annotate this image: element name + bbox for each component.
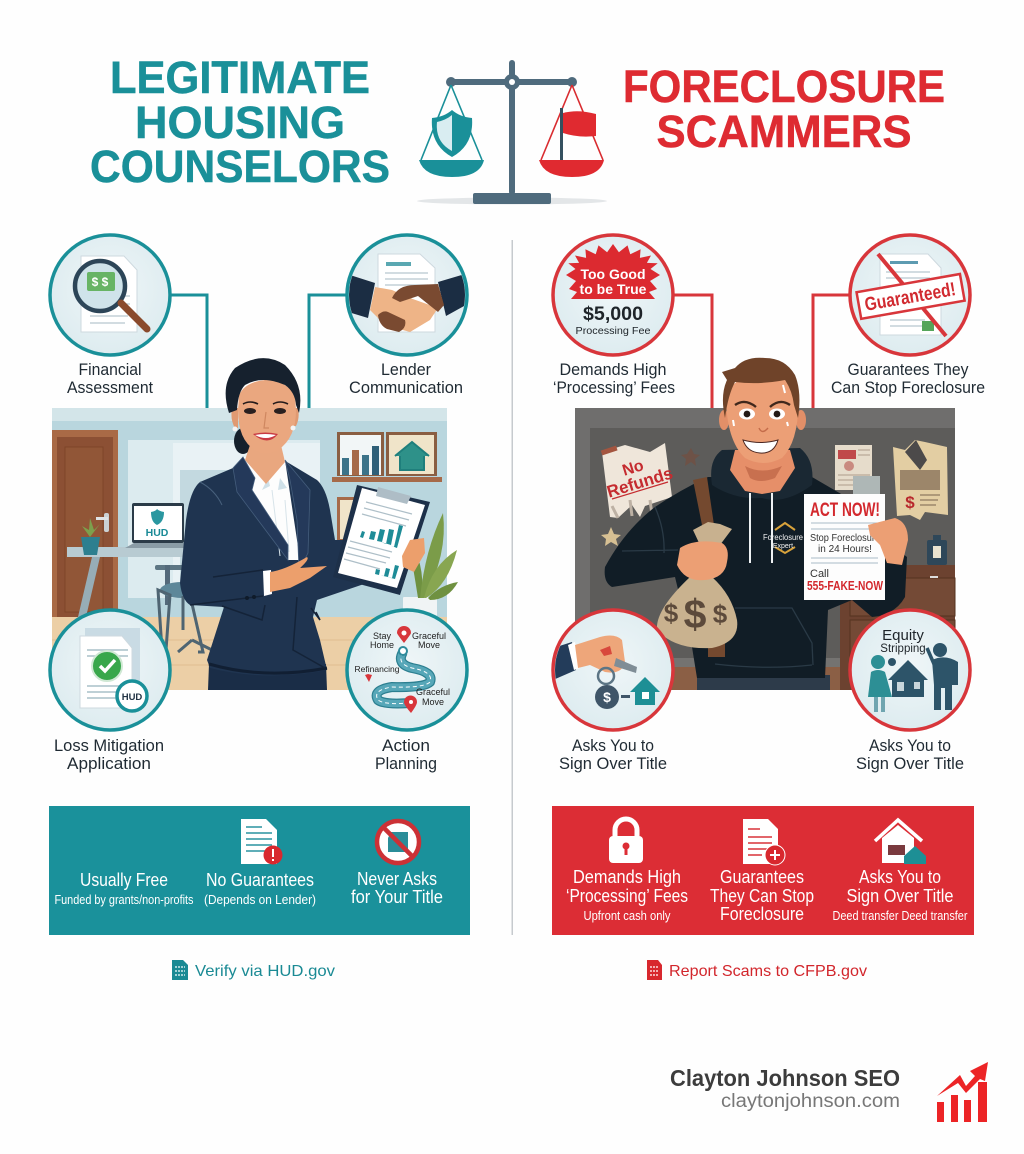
footer brand text — [670, 1065, 900, 1112]
asks you to sign over title: Deed transfer Deed transfer — [832, 909, 968, 923]
poster: no refunds — [601, 443, 675, 518]
label: action planning: Planning — [375, 755, 437, 773]
hood and neck — [711, 448, 812, 500]
clipboard — [333, 485, 430, 595]
logo: Foreclosure — [763, 533, 804, 542]
icon circle: too good to be true fee: Too Good — [580, 266, 646, 282]
head — [231, 408, 299, 428]
label: lender communication: Communication — [349, 379, 463, 397]
title: foreclosure scammers: SCAMMERS — [656, 106, 912, 157]
poster: no refunds: No — [620, 457, 646, 480]
demands high fees: Upfront cash only — [584, 909, 671, 923]
flyer: in 24 Hours! — [818, 544, 872, 555]
logo: Expert — [773, 543, 793, 550]
icon circle: too good to be true fee — [553, 235, 673, 355]
label: guarantees they can stop foreclosure: Guarantees They — [848, 361, 969, 379]
logo — [763, 523, 804, 553]
icon: document with alert — [241, 819, 282, 864]
no guarantees: No Guarantees — [206, 870, 314, 890]
label: demands high processing fees: Demands High — [560, 361, 666, 379]
icon circle: too good to be true fee: $5,000 — [583, 304, 643, 325]
guarantees they can stop foreclosure — [710, 867, 814, 924]
laptop — [132, 503, 184, 543]
footer brand text: claytonjohnson.com — [721, 1091, 900, 1112]
label: financial assessment: Financial — [78, 361, 142, 379]
icon: balance scale — [417, 60, 607, 204]
demands high fees — [566, 867, 688, 923]
icon: padlock — [609, 819, 643, 863]
icon circle: signing over keys: $ — [603, 689, 611, 705]
icon circle: signing over keys — [553, 610, 673, 730]
desk — [67, 547, 192, 557]
icon circle: action planning: Graceful — [416, 687, 450, 697]
label: asks you to sign over title, left: Sign Over Title — [559, 755, 667, 773]
lapels — [233, 457, 288, 560]
icon: document with plus — [743, 819, 785, 865]
icon circle: too good to be true fee: Processing Fee — [576, 325, 651, 337]
guarantees they can stop foreclosure: Foreclosure — [720, 904, 804, 924]
money bag: $ — [713, 599, 728, 629]
poster: no refunds: Refunds — [605, 463, 675, 502]
label: demands high processing fees: ‘Processing’ Fees — [553, 379, 675, 397]
flyer: ACT NOW! — [810, 500, 880, 521]
demands high fees: Demands High — [573, 867, 681, 887]
office scene — [52, 408, 458, 690]
icon circle: guaranteed stamp: Guaranteed! — [863, 279, 957, 316]
panel: legitimate counselor illustration — [52, 358, 458, 690]
trousers — [697, 675, 830, 690]
label: loss mitigation application: Loss Mitigation — [54, 737, 164, 755]
label: asks you to sign over title, right: Asks You to — [869, 737, 951, 755]
pocket and seams — [622, 507, 813, 667]
never asks for your title — [351, 869, 443, 907]
asks you to sign over title: Asks You to — [859, 867, 941, 887]
hair — [722, 358, 799, 418]
title: foreclosure scammers: FORECLOSURE — [623, 61, 945, 112]
panel: scammer illustration — [575, 358, 955, 690]
icon circle: action planning: Graceful — [412, 631, 446, 641]
dim room scene — [575, 408, 955, 690]
label: guarantees they can stop foreclosure: Can Stop Foreclosure — [831, 379, 985, 397]
icon: house with title — [875, 820, 926, 864]
icon circle: too good to be true fee: to be True — [580, 281, 647, 297]
title: legitimate housing counselors: HOUSING — [135, 97, 345, 148]
neck — [245, 445, 285, 484]
icon circle: financial assessment: $ $ — [92, 275, 109, 289]
head — [719, 410, 729, 430]
icon circle: equity stripping — [850, 610, 970, 730]
icon circle: equity stripping: Stripping — [880, 643, 926, 655]
asks you to sign over title: Sign Over Title — [846, 886, 954, 906]
label: asks you to sign over title, right — [856, 737, 964, 773]
icon: growth chart logo — [937, 1062, 988, 1122]
label: action planning: Action — [382, 737, 430, 755]
money bag — [657, 522, 737, 648]
label: asks you to sign over title, left: Asks You to — [572, 737, 654, 755]
money bag: $ — [664, 598, 679, 628]
posters on wall: $ — [905, 493, 915, 512]
hoodie — [605, 477, 907, 678]
title: legitimate housing counselors: LEGITIMATE — [110, 52, 370, 103]
divider — [512, 240, 513, 935]
trousers — [208, 664, 327, 690]
usually free: Usually Free — [80, 870, 168, 890]
icon circle: lender communication — [347, 235, 467, 355]
flyer — [804, 494, 885, 600]
label: asks you to sign over title, left — [559, 737, 667, 773]
link: verify via hud: Verify via HUD.gov — [195, 963, 335, 980]
label: lender communication — [349, 361, 463, 397]
never asks for your title: for Your Title — [351, 887, 443, 907]
footer brand text: Clayton Johnson SEO — [670, 1065, 900, 1091]
title: foreclosure scammers — [623, 61, 945, 157]
white shirt — [243, 457, 300, 560]
money bag: $ — [684, 591, 707, 637]
guarantees they can stop foreclosure: Guarantees — [720, 867, 804, 887]
shelf and frames — [332, 477, 442, 482]
icon circle: action planning — [347, 610, 467, 730]
jacket — [180, 462, 367, 676]
label: lender communication: Lender — [381, 361, 431, 379]
no guarantees — [204, 870, 316, 907]
flyer: Stop Foreclosure — [810, 533, 880, 544]
cuff and hand — [263, 570, 272, 596]
panel: teal summary banner — [49, 806, 470, 935]
icon circle: equity stripping: Equity — [882, 627, 924, 644]
icon circle: guaranteed stamp — [850, 235, 970, 355]
icon circle: action planning: Move — [422, 697, 444, 707]
flyer: Call — [810, 568, 829, 580]
never asks for your title: Never Asks — [357, 869, 437, 889]
label: loss mitigation application — [54, 737, 164, 773]
icon circle: action planning: Refinancing — [355, 664, 400, 674]
hair — [226, 358, 300, 413]
dresser — [840, 565, 955, 690]
label: asks you to sign over title, right: Sign Over Title — [856, 755, 964, 773]
icon circle: financial assessment — [50, 235, 170, 355]
label: action planning — [375, 737, 437, 773]
drawstrings — [750, 493, 772, 563]
label: guarantees they can stop foreclosure — [831, 361, 985, 397]
icon circle: action planning: Stay — [373, 631, 392, 641]
usually free — [54, 870, 194, 907]
icon circle: action planning: Move — [418, 640, 440, 650]
asks you to sign over title — [832, 867, 968, 923]
office scene: HUD — [146, 527, 169, 539]
no guarantees: (Depends on Lender) — [204, 893, 316, 907]
connector lines — [168, 295, 852, 408]
potted plant — [403, 513, 458, 617]
plant on desk — [81, 537, 100, 555]
label: loss mitigation application: Application — [67, 755, 151, 773]
scammer figure — [605, 358, 908, 690]
face — [735, 402, 790, 407]
label: demands high processing fees — [553, 361, 675, 397]
icon: prohibited document — [377, 821, 419, 863]
panel: red summary banner — [552, 806, 974, 935]
guarantees they can stop foreclosure: They Can Stop — [710, 886, 814, 906]
strap — [693, 477, 714, 525]
posters on wall — [835, 440, 948, 520]
icon circle: loss mitigation application: HUD — [122, 692, 142, 703]
label: financial assessment — [67, 361, 153, 397]
label: financial assessment: Assessment — [67, 379, 153, 397]
counselor figure — [180, 358, 430, 690]
usually free: Funded by grants/non-profits — [54, 893, 194, 907]
demands high fees: ‘Processing’ Fees — [566, 886, 688, 906]
title: legitimate housing counselors — [90, 52, 390, 192]
title: legitimate housing counselors: COUNSELORS — [90, 141, 390, 192]
face — [243, 402, 288, 404]
link: report scams to cfpb: Report Scams to CFPB.gov — [669, 963, 867, 980]
icon circle: loss mitigation application — [50, 610, 170, 730]
icon circle: action planning: Home — [370, 640, 394, 650]
flyer: 555-FAKE-NOW — [807, 578, 884, 593]
